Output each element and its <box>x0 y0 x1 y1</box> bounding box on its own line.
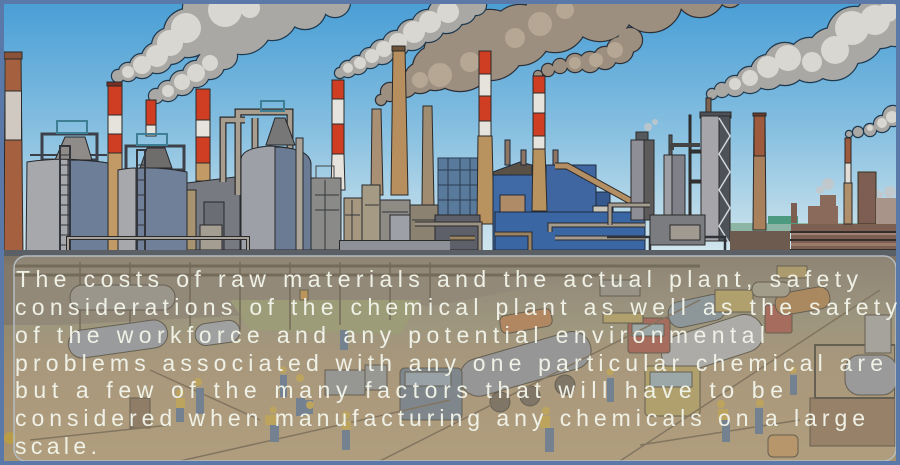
caption text: of the workforce and any potential environmental <box>15 322 765 348</box>
chimney: right brown stack <box>753 113 766 230</box>
workers <box>4 330 797 452</box>
inclined conveyor pipe fill <box>555 166 636 204</box>
chimney: red and white 2 <box>146 100 156 136</box>
chimneys: tan stacks <box>371 46 434 205</box>
chimney: red and white 5 <box>477 51 494 224</box>
blue building <box>493 140 645 250</box>
caption text: problems associated with any one particular chemical are <box>15 350 883 376</box>
chimney: red and white 1 <box>107 82 122 256</box>
process units in centre <box>311 166 480 250</box>
caption panel <box>14 256 896 461</box>
building: grey workshop <box>187 177 240 250</box>
blue lattice unit behind centre <box>438 158 480 218</box>
caption text: The costs of raw materials and the actual plant, safety <box>16 266 859 292</box>
foreground: yard below the caption <box>4 256 897 461</box>
caption text <box>15 266 898 459</box>
chimney: red and white 3 <box>196 89 210 181</box>
factory base band <box>4 215 896 258</box>
containers and crates <box>130 290 897 457</box>
pipe rack in yard <box>14 262 700 330</box>
pipe racks along foreground <box>68 205 896 254</box>
road markings <box>30 290 880 461</box>
tanker trucks <box>67 266 831 420</box>
chimney: far left brown <box>4 52 23 256</box>
chimney: red and white 6 <box>532 76 547 211</box>
sky background <box>4 4 896 254</box>
tank: tall pressure vessel with pipes <box>223 101 311 250</box>
caption text: considered when manufacturing any chemicals on a large <box>15 405 865 431</box>
distant background: green strip and far buildings <box>730 172 896 256</box>
caption text: but a few of the many factors that will have to be <box>15 377 783 403</box>
smoke plumes <box>112 0 900 200</box>
distillation columns <box>631 98 731 244</box>
caption text: considerations of the chemical plant as well as the safety <box>15 294 898 320</box>
tank: second storage tank <box>118 134 187 256</box>
chimney: far right thin stack <box>844 138 852 224</box>
caption text: scale. <box>15 433 97 459</box>
tank: left storage tank <box>26 121 108 256</box>
inclined conveyor pipe <box>555 166 636 204</box>
chimney: red and white 4 <box>331 80 345 190</box>
